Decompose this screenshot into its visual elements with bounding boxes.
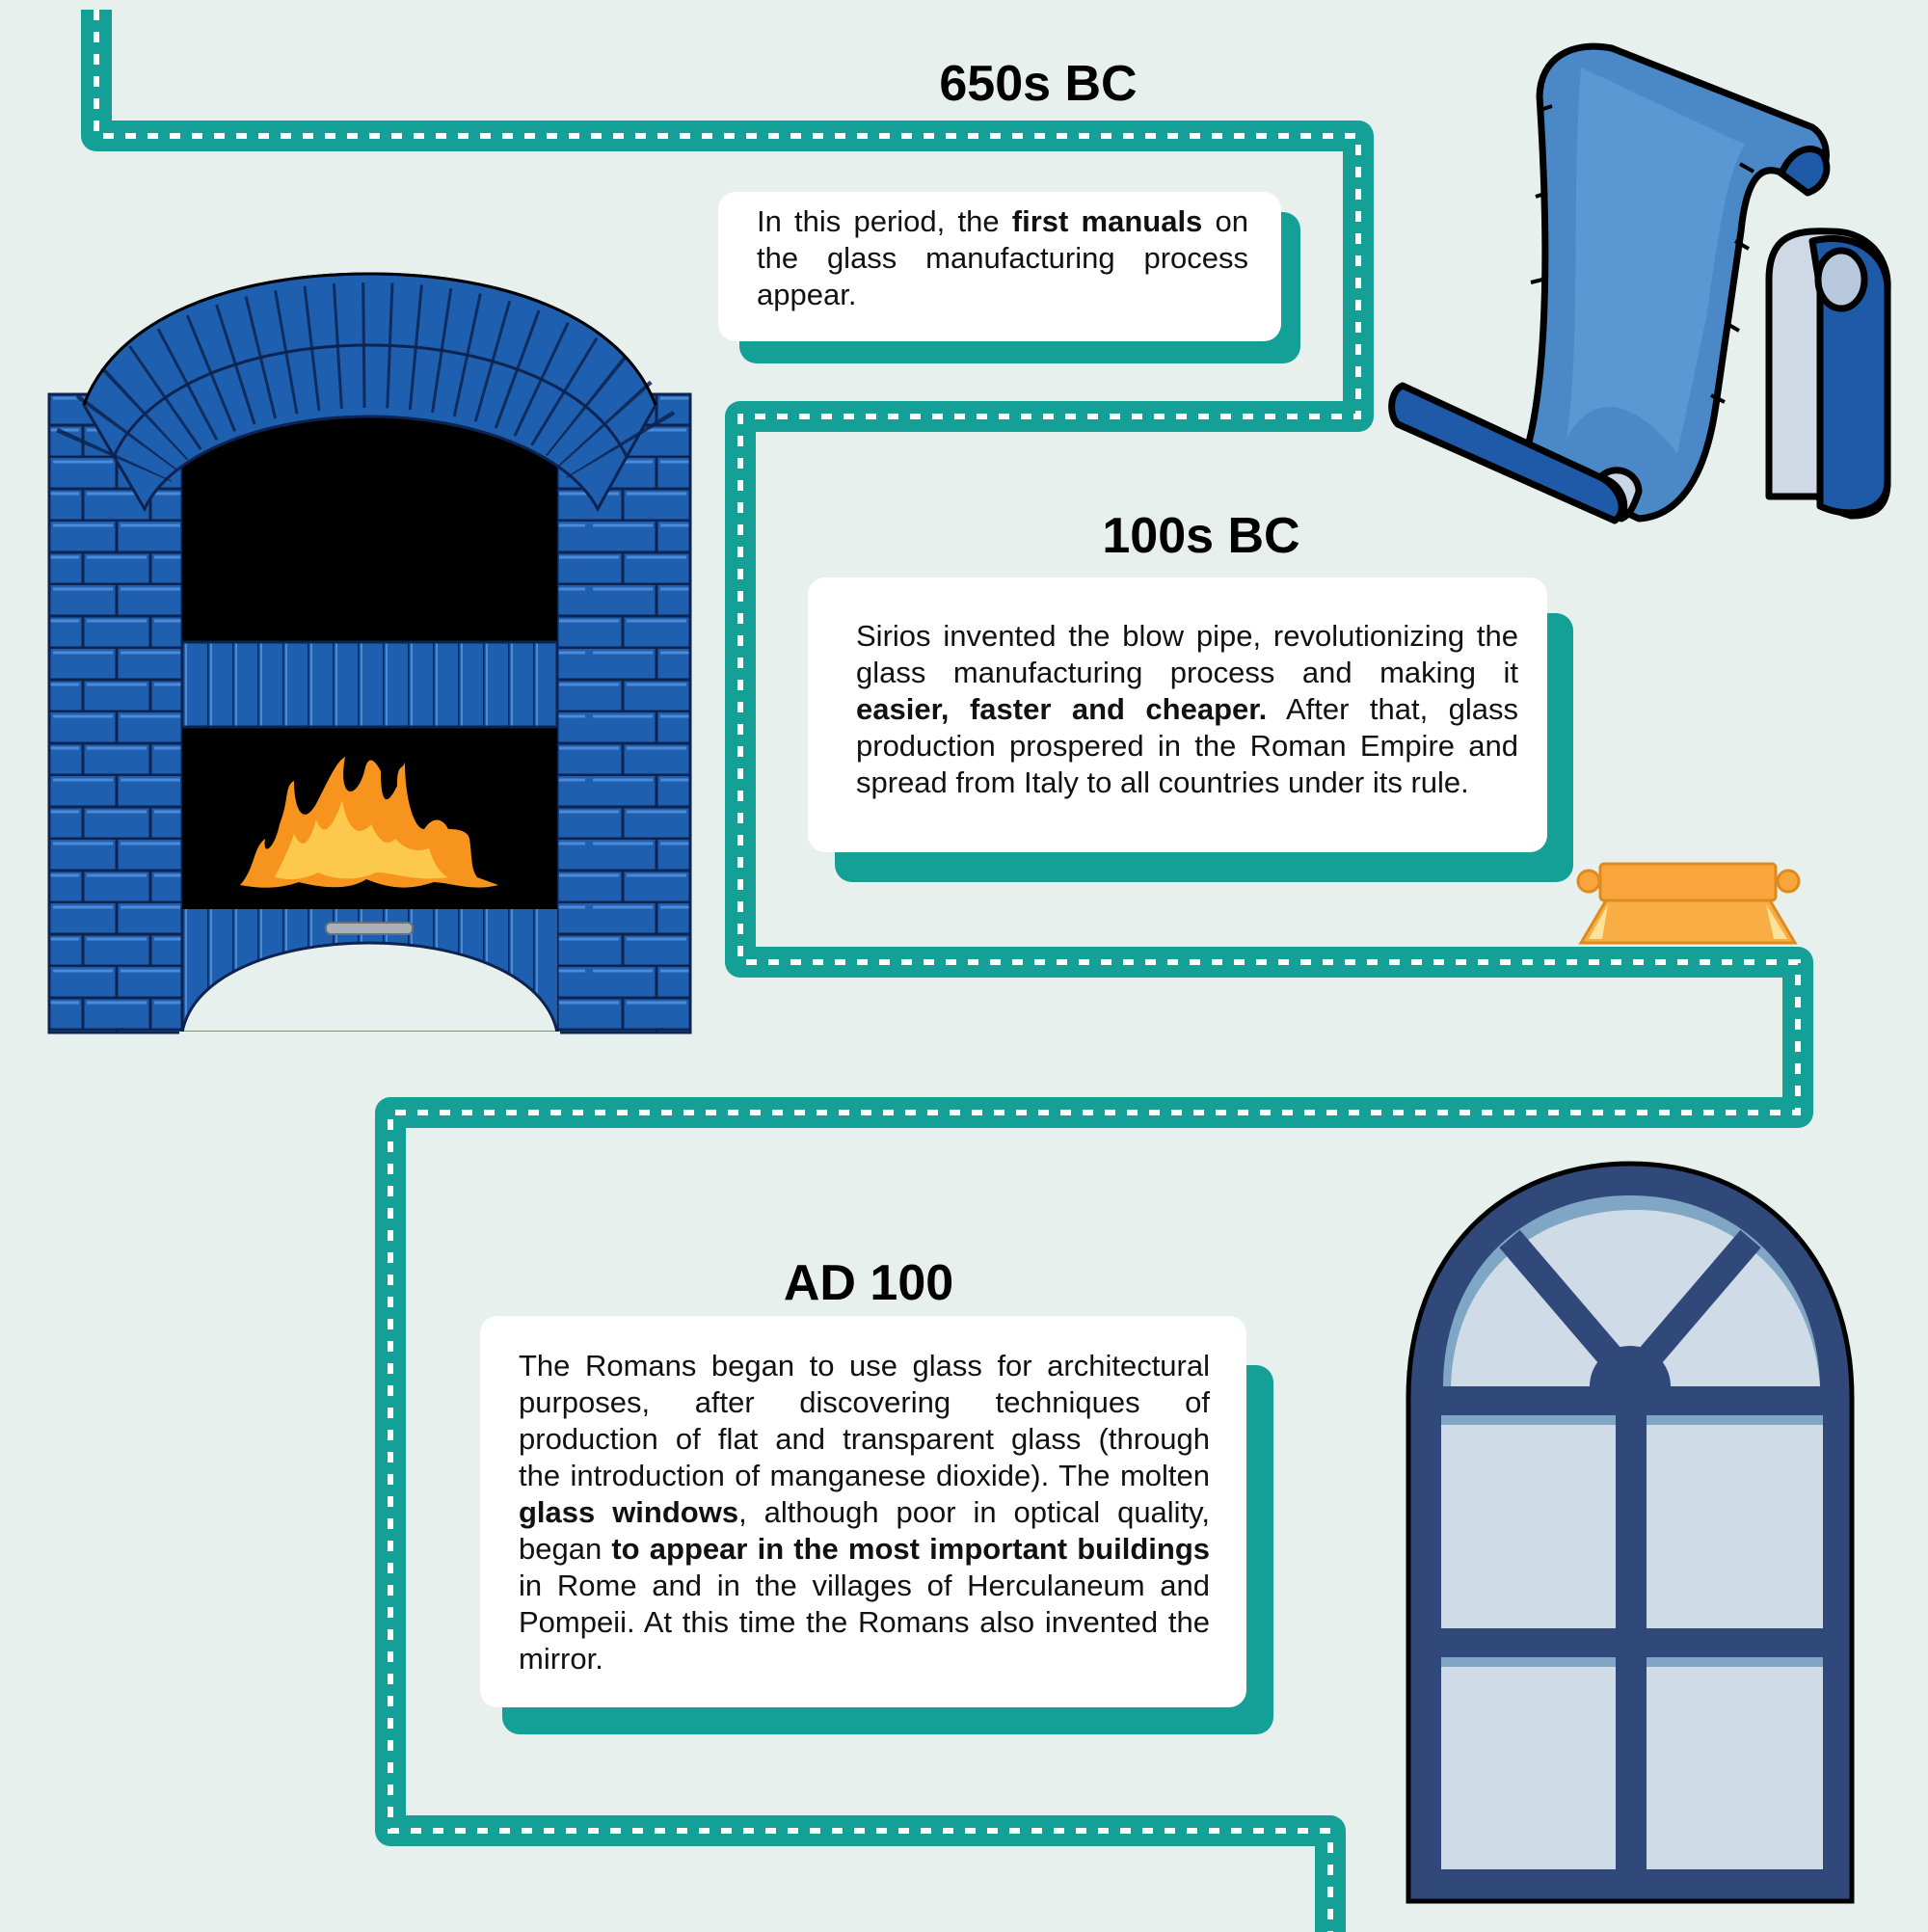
icon: glass pot [1578,864,1799,943]
text: AD 100: production of flat and transparent glass (through [519,1422,1210,1456]
grate band [182,642,557,727]
text: 650s BC [757,204,1248,311]
heading: 100s BC: 100s BC [1102,508,1300,564]
icon: brick furnace [49,274,690,1037]
text: 650s BC: appear. [757,278,856,311]
text: AD 100: the introduction of manganese dioxide). The molten [519,1459,1210,1492]
text: 100s BC [856,619,1518,799]
icon: scroll [1392,46,1888,521]
text: AD 100: in Rome and in the villages of Herculaneum and [519,1569,1210,1602]
panel: 650s BC text box [718,192,1300,363]
panel: AD 100 text box [480,1316,1273,1734]
heading: 650s BC: 650s BC [939,56,1138,112]
bottom band [182,909,557,1033]
text: AD 100: purposes, after discovering techniques of [519,1385,1210,1419]
text: AD 100: Pompeii. At this time the Romans also invented the [519,1605,1210,1639]
text: 650s BC: the glass manufacturing process [757,241,1248,275]
text: AD 100: The Romans began to use glass for architectural [519,1349,1210,1382]
text: 100s BC: easier, faster and cheaper. After that, glass [856,692,1518,726]
text: AD 100: began to appear in the most important buildings [519,1532,1210,1566]
text: AD 100: mirror. [519,1642,603,1676]
text: 100s BC: production prospered in the Roman Empire and [856,729,1518,763]
panel: 100s BC text box [808,577,1573,882]
arch [84,274,656,509]
text: AD 100 [519,1349,1211,1676]
icon: arched window [1408,1164,1852,1901]
text: 100s BC: glass manufacturing process and making it [856,656,1518,689]
heading: AD 100: AD 100 [784,1255,953,1311]
text: 650s BC: In this period, the first manuals on [757,204,1248,238]
text: 100s BC: spread from Italy to all countries under its rule. [856,765,1469,799]
furnace opening [182,405,557,909]
text: 100s BC: Sirios invented the blow pipe, revolutionizing the [856,619,1518,653]
text: AD 100: glass windows, although poor in optical quality, [519,1495,1210,1529]
fire [240,757,498,888]
